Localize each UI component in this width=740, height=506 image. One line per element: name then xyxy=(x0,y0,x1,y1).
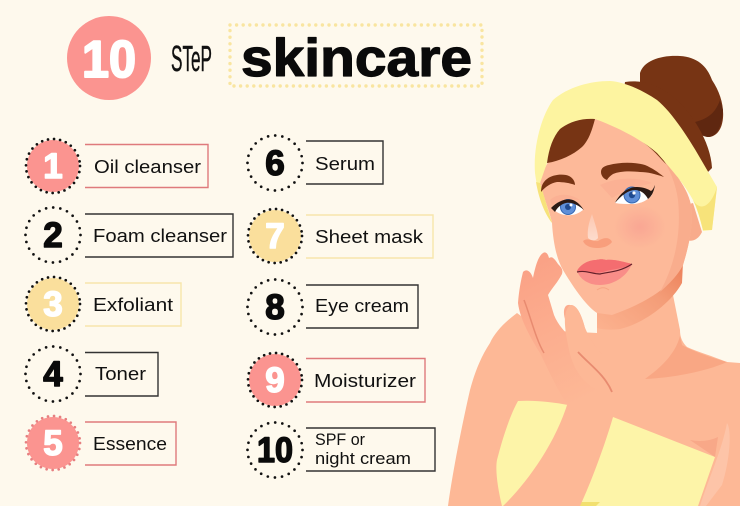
arm highlight xyxy=(700,423,730,506)
face xyxy=(540,119,692,315)
eyebrows xyxy=(541,163,664,192)
hand xyxy=(518,252,622,418)
step 2: 2 xyxy=(43,216,63,255)
step 2 xyxy=(26,208,233,262)
towel xyxy=(496,401,715,506)
step 9 xyxy=(248,353,425,407)
title: STeP xyxy=(171,38,212,79)
step 1: 1 xyxy=(43,147,63,186)
hair back xyxy=(620,81,712,190)
step 10: night cream xyxy=(315,450,411,468)
word: skincare: skincare xyxy=(241,29,472,88)
step 6 xyxy=(248,136,383,190)
body xyxy=(448,290,740,506)
illustration: woman xyxy=(448,56,740,506)
step 5: Essence xyxy=(93,433,167,454)
step 3: 3 xyxy=(43,285,63,324)
step 6: Serum xyxy=(315,153,375,174)
eye sockets xyxy=(550,179,652,205)
step 2: Foam cleanser xyxy=(93,225,227,246)
neck shade xyxy=(597,262,683,330)
step 9: Moisturizer xyxy=(314,370,416,391)
lips xyxy=(577,259,632,285)
chin mark xyxy=(597,288,609,290)
nose xyxy=(583,214,612,248)
badge: 10 xyxy=(67,16,151,100)
step 1: Oil cleanser xyxy=(94,156,201,177)
step 10 xyxy=(248,422,435,478)
step 4: 4 xyxy=(43,355,63,394)
step 10: 10 xyxy=(257,431,293,470)
step 5: 5 xyxy=(43,424,63,463)
shoulder shadow xyxy=(645,336,727,379)
step 8 xyxy=(248,280,418,334)
right eye xyxy=(615,185,655,204)
step 8: 8 xyxy=(265,288,285,327)
step 6: 6 xyxy=(265,144,285,183)
step 4 xyxy=(26,346,158,402)
face shading right xyxy=(660,155,692,292)
chest shadow xyxy=(690,437,718,457)
step 7: 7 xyxy=(265,217,285,256)
step 8: Eye cream xyxy=(315,295,409,316)
left eye xyxy=(551,199,584,215)
step 1 xyxy=(26,139,208,193)
ear xyxy=(686,203,702,241)
step 7 xyxy=(248,209,433,263)
hair front xyxy=(547,119,595,163)
step 7: Sheet mask xyxy=(315,226,424,247)
hair bun xyxy=(640,56,723,137)
badge: 10: 10 xyxy=(82,31,136,89)
dotted frame xyxy=(230,25,482,86)
step 10: SPF or xyxy=(315,431,365,449)
title xyxy=(67,16,482,100)
forearm xyxy=(503,402,613,506)
step 5 xyxy=(26,416,176,470)
step 3: Exfoliant xyxy=(93,294,173,315)
headband xyxy=(535,81,717,231)
step 3 xyxy=(26,277,181,331)
step 4: Toner xyxy=(95,363,146,384)
cheek blush xyxy=(614,205,666,249)
step 9: 9 xyxy=(265,361,285,400)
